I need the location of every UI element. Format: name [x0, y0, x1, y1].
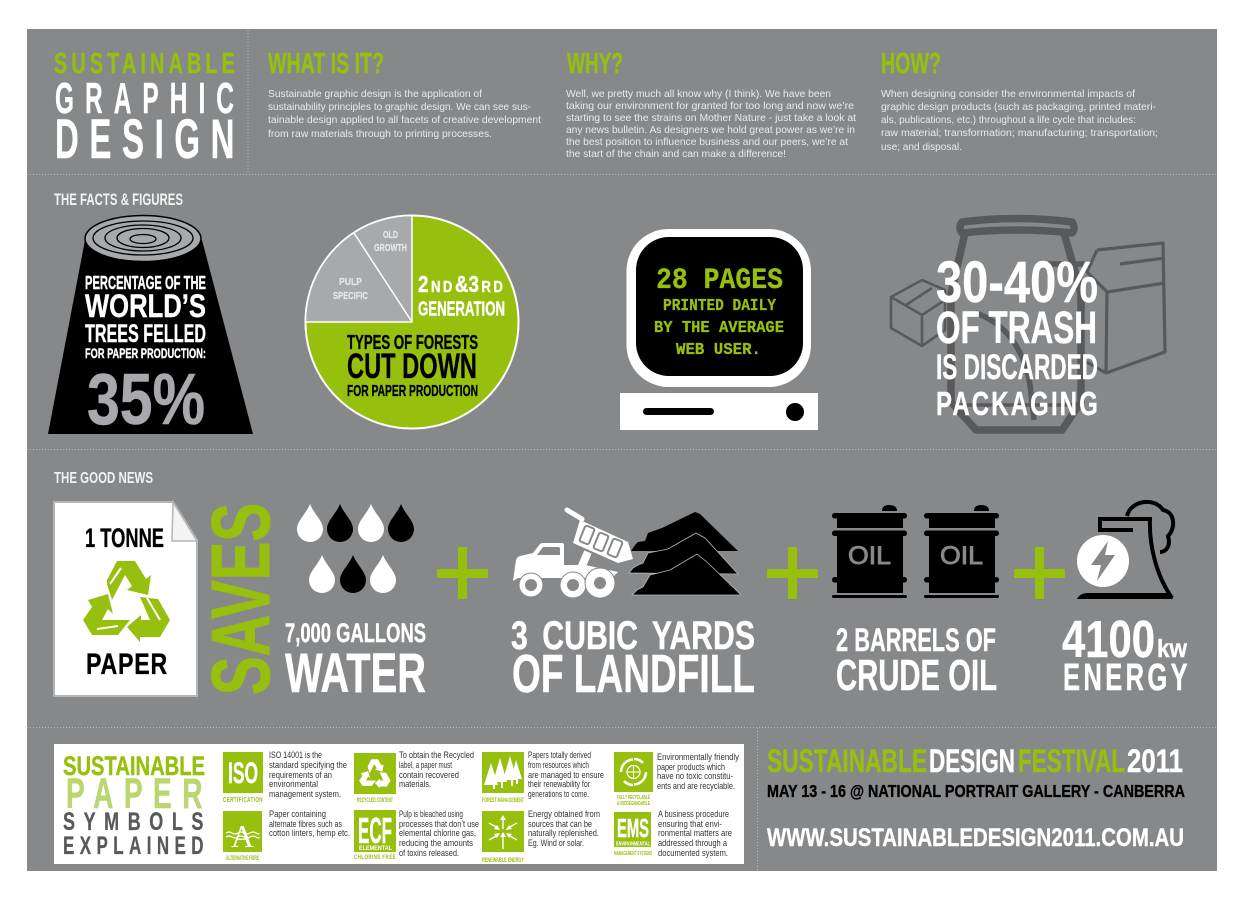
heading: sustainable paper symbols explained: EXPLAINED	[63, 832, 209, 860]
text: ECF description: processes that don’t use	[399, 819, 479, 829]
paper sheet: 1 tonne paper: 1 TONNE	[85, 523, 164, 553]
tree stump statistic	[48, 216, 253, 440]
icon: plus	[1014, 547, 1065, 599]
text block: why: Well, we pretty much all know why (I think). We have been	[566, 89, 831, 100]
statistic: water	[285, 618, 426, 704]
icon: bottle	[951, 218, 1085, 430]
statistic: landfill: 3 CUBIC YARDS	[511, 614, 755, 658]
icon: oil barrel	[924, 505, 999, 598]
statistic: crude oil: 2 BARRELS OF	[836, 622, 996, 658]
text: forest description: from resources which	[528, 760, 589, 770]
pie chart: forest types: OLD	[383, 229, 398, 241]
icon: ECF chlorine free: ECF	[358, 810, 392, 851]
icon: plus	[767, 547, 818, 599]
heading: sustainable paper symbols explained	[63, 751, 213, 860]
pie chart: forest types: GENERATION	[418, 298, 505, 320]
tree stump statistic: WORLD’S	[85, 288, 206, 324]
icon: oil barrel: OIL	[848, 542, 891, 570]
icon: oil barrel: OIL	[940, 542, 983, 570]
text block: what is it: Sustainable graphic design is the application of	[268, 89, 482, 100]
pie chart: forest types: CUT DOWN	[347, 347, 477, 386]
text block: what is it: WHAT IS IT?	[268, 48, 384, 80]
text: EMS description: documented system.	[658, 848, 728, 858]
statistic: landfill	[511, 614, 755, 704]
text: recycled description: materials.	[399, 779, 431, 789]
text block: why: the start of the chain and can make a difference!	[566, 149, 786, 160]
saves vertical text: SAVES	[194, 503, 287, 695]
title: SUSTAINABLE	[54, 48, 239, 80]
text block: why: starting to see the strains on Mother Nature - just take a look at	[566, 113, 856, 124]
icon: renewable energy: RENEWABLE ENERGY	[482, 857, 524, 864]
statistic: trash: OF TRASH	[936, 302, 1097, 353]
tree stump statistic: 35%	[87, 360, 205, 440]
statistic: water: 7,000 GALLONS	[285, 618, 426, 648]
heading: sustainable paper symbols explained: PAPER	[66, 770, 213, 818]
text block: how: als, publications, etc.) throughout a life cycle that includes:	[881, 115, 1136, 126]
statistic: energy: kw	[1157, 635, 1187, 663]
text: alternative fibre description: cotton linters, hemp etc.	[269, 828, 350, 838]
pie chart: forest types: TYPES OF FORESTS	[347, 332, 478, 354]
pie chart: forest types: SPECIFIC	[333, 290, 368, 302]
pie chart: forest types: FOR PAPER PRODUCTION	[347, 383, 478, 400]
tree stump statistic: TREES FELLED	[85, 320, 206, 348]
text block: how: graphic design products (such as packaging, printed materi-	[881, 102, 1156, 113]
text: alternative fibre description	[269, 809, 350, 838]
icon: ISO certification: ISO	[228, 757, 258, 790]
text: ECF description: reducing the amounts	[399, 838, 473, 848]
heading: sustainable paper symbols explained: SUSTAINABLE	[63, 751, 205, 781]
text: renewable description: naturally replenished.	[528, 828, 599, 838]
text: renewable description	[528, 809, 600, 848]
text: recycled description	[399, 750, 474, 789]
icon: forest management: FOREST MANAGEMENT	[482, 798, 524, 804]
icon: milk carton	[1083, 243, 1165, 373]
statistic: trash: 30-40%	[936, 250, 1098, 315]
computer: pages printed: WEB USER.	[676, 340, 761, 359]
icon: power plant	[1077, 502, 1173, 599]
text block: what is it: tainable design applied to all facets of creative development	[268, 115, 541, 126]
text: ISO description: ISO 14001 is the	[269, 750, 322, 760]
icon: landfill mounds	[629, 512, 741, 595]
icon: forest management	[482, 752, 524, 804]
statistic: trash: PACKAGING	[936, 385, 1100, 422]
text block: why: any news bulletin. As designers we hold great power as we’re in	[566, 125, 855, 136]
text: EMS description: A business procedure	[658, 809, 729, 819]
title: GRAPHIC	[55, 74, 245, 123]
icon: ECF chlorine free	[354, 810, 396, 861]
text block: how: raw material; transformation; manufacturing; transportation;	[881, 128, 1158, 139]
text: recyclable description	[657, 752, 739, 791]
text: forest description: are managed to ensure	[528, 770, 604, 780]
text: recycled description: To obtain the Recycled	[399, 750, 474, 760]
title: DESIGN	[55, 107, 245, 170]
computer: pages printed: 28 PAGES	[656, 264, 783, 298]
icon: alternative fibre	[223, 811, 262, 862]
text block: how	[881, 48, 1158, 153]
icon: EMS	[614, 812, 652, 857]
text block: why: WHY?	[567, 48, 623, 80]
icon: recycle symbol	[83, 561, 170, 642]
text: forest description: generations to come.	[528, 789, 589, 799]
festival details: SUSTAINABLE	[767, 743, 927, 779]
text: ISO description: environmental	[269, 779, 318, 789]
festival details	[767, 743, 1185, 852]
icon: ISO certification	[223, 752, 263, 804]
pie chart: forest types: GROWTH	[374, 242, 407, 254]
text: ISO description: standard specifying the	[269, 760, 347, 770]
tree stump statistic: PERCENTAGE OF THE	[85, 273, 206, 293]
text: ECF description: of toxins released.	[399, 848, 459, 858]
text: forest description: their renewability for	[528, 779, 590, 789]
text: renewable description: Eg. Wind or solar.	[528, 838, 584, 848]
text: renewable description: Energy obtained from	[528, 809, 600, 819]
statistic: crude oil	[836, 622, 997, 700]
icon: ECF chlorine free: CHLORINE FREE	[354, 854, 396, 861]
text: recycled description: label, a paper must	[399, 760, 452, 770]
paper sheet: 1 tonne paper: PAPER	[86, 648, 168, 681]
computer: pages printed: BY THE AVERAGE	[654, 318, 784, 337]
text: ECF description: Pulp is bleached using	[399, 809, 463, 819]
text block: what is it: from raw materials through to printing processes.	[268, 129, 492, 140]
icon: cardboard box	[891, 280, 945, 346]
text block: why: taking our environment for granted for too long and now we’re	[566, 101, 854, 112]
text: EMS description	[658, 809, 732, 858]
heading: facts and figures: THE FACTS & FIGURES	[54, 190, 183, 209]
tree stump statistic: FOR PAPER PRODUCTION:	[85, 346, 206, 361]
statistic: trash	[936, 250, 1100, 422]
pie chart: forest types: 2ND&3RD	[418, 272, 505, 297]
icon: ISO certification: CERTIFICATION	[223, 797, 263, 804]
paper sheet: 1 tonne paper	[54, 502, 197, 696]
pie chart: forest types	[306, 216, 518, 428]
icon: alternative fibre: ALTERNATIVE FIBRE	[226, 856, 259, 862]
icon: EMS: MANAGEMENT SYSTEMS	[614, 851, 652, 857]
text block: how: use; and disposal.	[881, 142, 962, 153]
text: EMS description: ronmental matters are	[658, 828, 732, 838]
text: alternative fibre description: alternate fibres such as	[269, 819, 342, 829]
title	[54, 48, 245, 170]
computer: pages printed: PRINTED DAILY	[663, 296, 776, 315]
text block: how: HOW?	[881, 48, 941, 80]
text: EMS description: ensuring that envi-	[658, 819, 722, 829]
text: forest description: Papers totally derived	[528, 750, 591, 760]
icon: EMS: ENVIRONMENTAL	[616, 842, 650, 848]
icon: ECF chlorine free: ELEMENTAL	[359, 846, 392, 852]
statistic: trash: IS DISCARDED	[936, 348, 1098, 387]
text: EMS description: addressed through a	[658, 838, 728, 848]
text: recycled description: contain recovered	[399, 770, 459, 780]
text block: what is it: sustainability principles to graphic design. We can see sus-	[268, 102, 531, 113]
text: ECF description: elemental chlorine gas,	[399, 828, 476, 838]
festival details: 2011	[1127, 743, 1183, 779]
text: ISO description	[269, 750, 347, 799]
text block: why: the best position to influence business and our peers, we’re at	[566, 137, 848, 148]
statistic: energy	[1062, 611, 1191, 699]
icon: alternative fibre: A	[231, 818, 254, 854]
icon: renewable energy	[482, 811, 524, 864]
text: forest description	[528, 750, 604, 799]
heading: the good news: THE GOOD NEWS	[54, 470, 153, 487]
statistic: energy: 4100	[1062, 611, 1155, 669]
text: ISO description: requirements of an	[269, 770, 332, 780]
text: alternative fibre description: Paper containing	[269, 809, 326, 819]
panel: paper symbols	[54, 744, 744, 864]
text: ECF description	[399, 809, 479, 858]
text: renewable description: sources that can be	[528, 819, 592, 829]
computer: pages printed	[620, 229, 818, 430]
icon: oil barrel	[832, 505, 907, 598]
heading: sustainable paper symbols explained: SYMBOLS	[63, 808, 212, 836]
festival details: DESIGN	[929, 743, 1015, 779]
text: recyclable description: have no toxic constitu-	[657, 771, 733, 781]
icon: EMS: EMS	[617, 813, 649, 843]
icon: recycled content: RECYCLED CONTENT	[357, 798, 393, 804]
text: recyclable description: ents and are recyclable.	[657, 781, 735, 791]
icon: fully recyclable: FULLY RECYCLABLE	[617, 795, 650, 801]
text: ISO description: management system.	[269, 789, 341, 799]
icons: discarded packaging	[891, 218, 1165, 430]
text block: why	[566, 48, 856, 160]
pie chart: forest types: PULP	[339, 276, 362, 288]
icon: fully recyclable: & BIODEGRADABLE	[617, 801, 650, 807]
icon: water drops	[297, 504, 414, 593]
text: recyclable description: paper products which	[657, 762, 725, 772]
statistic: landfill: OF LANDFILL	[512, 644, 755, 704]
text block: what is it	[268, 48, 541, 140]
icon: dump truck	[513, 510, 633, 598]
statistic: crude oil: CRUDE OIL	[836, 651, 997, 700]
statistic: water: WATER	[285, 641, 426, 704]
text block: how: When designing consider the environmental impacts of	[881, 89, 1135, 100]
text: recyclable description: Environmentally friendly	[657, 752, 739, 762]
icon: recycled content	[354, 753, 396, 804]
icon: fully recyclable	[614, 752, 653, 807]
festival details: FESTIVAL	[1018, 743, 1125, 779]
icon: plus	[437, 547, 488, 599]
